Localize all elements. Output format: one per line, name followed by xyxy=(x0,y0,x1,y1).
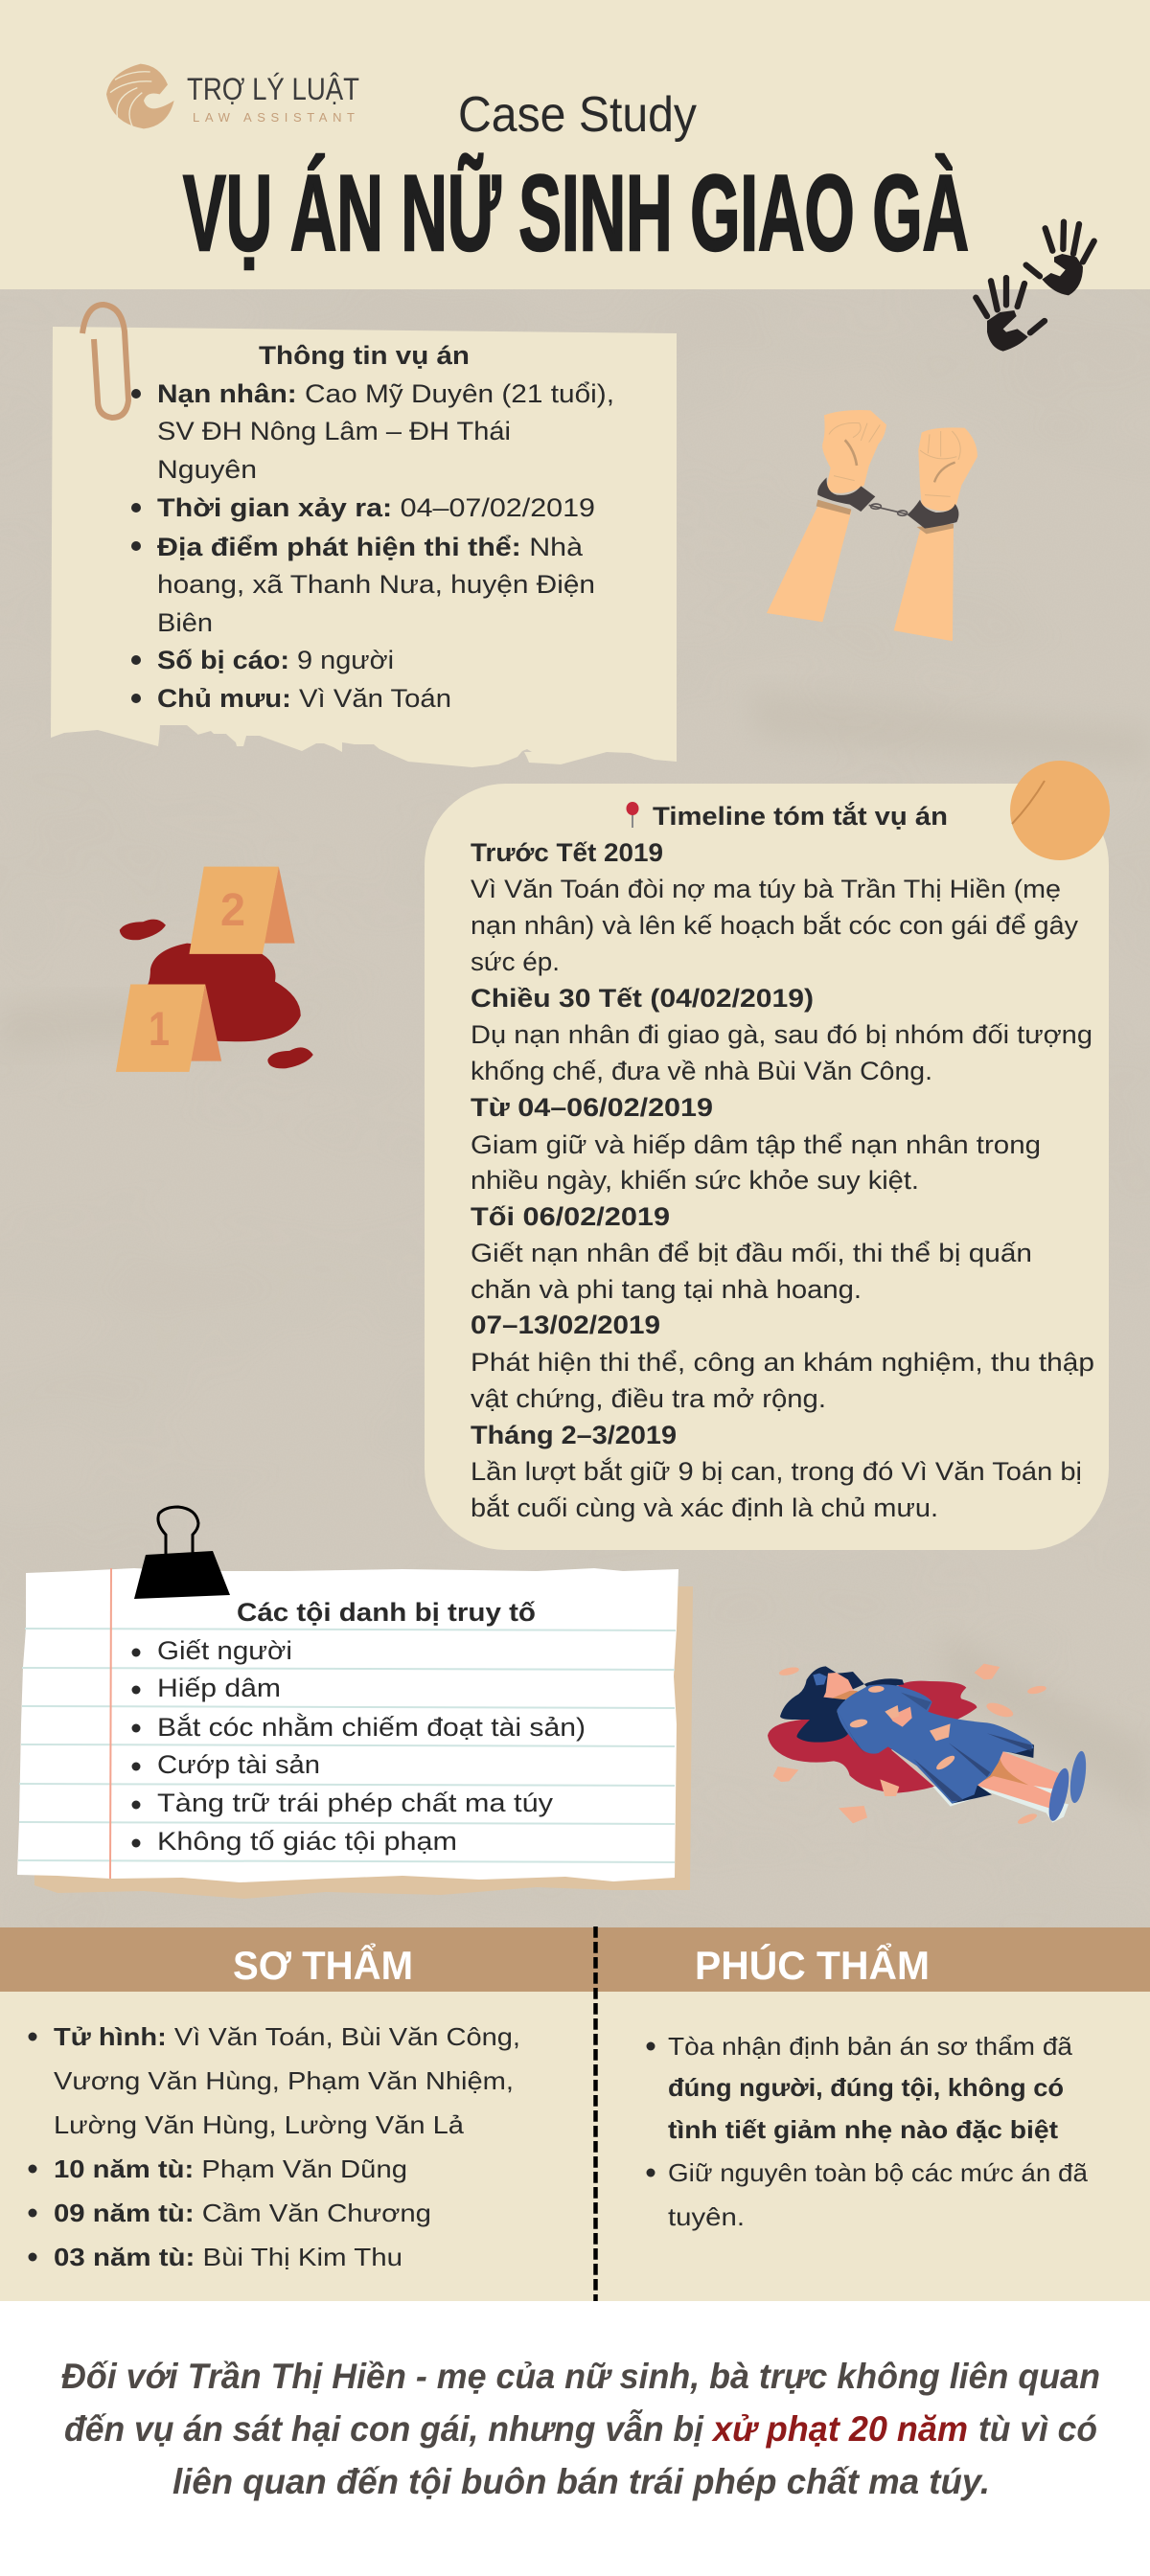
column: first instance sentences: Vương Văn Hùng, Phạm Văn Nhiệm, xyxy=(54,2066,514,2095)
heading: appeal: PHÚC THẨM xyxy=(695,1942,930,1988)
timeline entries: vật chứng, điều tra mở rộng. xyxy=(471,1384,826,1413)
closing statement: liên quan đến tội buôn bán trái phép chất ma túy. xyxy=(172,2462,990,2501)
column: appeal outcome: tình tiết giảm nhẹ nào đặc biệt xyxy=(668,2115,1058,2144)
subtitle: Case Study: Case Study xyxy=(458,87,697,143)
icon: eagle emblem xyxy=(106,64,174,128)
timeline entries: Chiều 30 Tết (04/02/2019) xyxy=(471,984,814,1013)
timeline entries: khống chế, đưa về nhà Bùi Văn Công. xyxy=(471,1057,932,1085)
heading: Thông tin vụ án xyxy=(259,341,470,370)
column: first instance sentences: 09 năm tù: Cầm Văn Chương xyxy=(54,2199,431,2227)
icon: victim lying in blood with leaves xyxy=(768,1664,1089,1826)
closing statement: đến vụ án sát hại con gái, nhưng vẫn bị xyxy=(64,2409,704,2449)
panel: charges notebook page xyxy=(17,1507,693,1899)
textured paper background xyxy=(0,289,1150,1927)
timeline entries: nhiều ngày, khiến sức khỏe suy kiệt. xyxy=(471,1166,919,1195)
heading: Các tội danh bị truy tố xyxy=(237,1598,536,1627)
timeline entries: Vì Văn Toán đòi nợ ma túy bà Trần Thị Hiền (mẹ xyxy=(471,875,1061,903)
bulleted facts: SV ĐH Nông Lâm – ĐH Thái xyxy=(157,417,511,445)
timeline entries: Tối 06/02/2019 xyxy=(471,1202,670,1231)
logo: Trợ Lý Luật: TRỢ LÝ LUẬT xyxy=(187,72,359,106)
icon: handcuffed fists xyxy=(767,410,978,641)
timeline entries: nạn nhân) và lên kế hoạch bắt cóc con gái để gây xyxy=(471,910,1079,940)
bulleted facts: Nạn nhân: Cao Mỹ Duyên (21 tuổi), xyxy=(157,379,614,408)
timeline entries: 07–13/02/2019 xyxy=(471,1311,660,1339)
brown header band xyxy=(0,1927,1150,1992)
marker number 1: 1 xyxy=(149,1002,170,1056)
timeline entries: Giam giữ và hiếp dâm tập thể nạn nhân trong xyxy=(471,1130,1041,1159)
panel: trial verdicts xyxy=(0,1926,1150,2301)
heading: Timeline tóm tắt vụ án xyxy=(653,801,948,831)
icon: red pin xyxy=(627,802,638,828)
bulleted facts xyxy=(131,379,614,713)
closing statement: xử phạt 20 năm xyxy=(711,2409,968,2449)
fallen leaves xyxy=(773,1664,1047,1826)
closing statement xyxy=(0,2301,1150,2576)
ruled lines xyxy=(18,1629,676,1862)
icon: black binder clip xyxy=(134,1507,230,1599)
bulleted facts: Số bị cáo: 9 người xyxy=(157,646,394,674)
closing statement: Đối với Trần Thị Hiền - mẹ của nữ sinh, bà trực không liên quan xyxy=(61,2357,1100,2396)
bulleted facts: Địa điểm phát hiện thi thể: Nhà xyxy=(157,533,584,561)
list of charges: Tàng trữ trái phép chất ma túy xyxy=(157,1789,554,1817)
list of charges xyxy=(132,1636,586,1856)
panel: case information note xyxy=(51,305,677,767)
column: appeal outcome: Tòa nhận định bản án sơ thẩm đã xyxy=(668,2032,1073,2061)
bulleted facts: hoang, xã Thanh Nưa, huyện Điện xyxy=(157,570,595,599)
column: appeal outcome: Giữ nguyên toàn bộ các mức án đã xyxy=(668,2158,1089,2187)
timeline entries: sức ép. xyxy=(471,947,560,976)
column: appeal outcome: tuyên. xyxy=(668,2202,745,2231)
column: first instance sentences: 10 năm tù: Phạm Văn Dũng xyxy=(54,2154,407,2183)
torn paper sheet xyxy=(51,327,677,767)
bulleted facts: Nguyên xyxy=(157,455,257,484)
header band xyxy=(0,0,1150,289)
bulleted facts: Biên xyxy=(157,608,213,637)
column: first instance sentences: Lường Văn Hùng, Lường Văn Lả xyxy=(54,2110,465,2139)
white torn page xyxy=(17,1568,678,1882)
icon: round paper sticker xyxy=(1010,761,1110,860)
column: appeal outcome xyxy=(646,2032,1089,2231)
closing statement: tù vì có xyxy=(978,2409,1097,2449)
column: first instance sentences: 03 năm tù: Bùi Thị Kim Thu xyxy=(54,2243,402,2271)
timeline entries: Giết nạn nhân để bịt đầu mối, thi thể bị quấn xyxy=(471,1239,1032,1267)
timeline entries: Lần lượt bắt giữ 9 bị can, trong đó Vì Văn Toán bị xyxy=(471,1456,1082,1486)
heading: first instance: SƠ THẨM xyxy=(233,1942,413,1988)
tan backing sheet xyxy=(33,1586,693,1899)
timeline entries: Tháng 2–3/2019 xyxy=(471,1421,677,1449)
timeline entries: Dụ nạn nhân đi giao gà, sau đó bị nhóm đối tượng xyxy=(471,1020,1092,1049)
list of charges: Cướp tài sản xyxy=(157,1750,320,1779)
list of charges: Không tố giác tội phạm xyxy=(157,1827,457,1856)
panel: timeline xyxy=(425,761,1110,1550)
marker number 2: 2 xyxy=(220,885,245,936)
column: appeal outcome: đúng người, đúng tội, không có xyxy=(668,2073,1064,2102)
timeline entries: chăn và phi tang tại nhà hoang. xyxy=(471,1275,862,1304)
logo: Trợ Lý Luật: LAW ASSISTANT xyxy=(193,110,355,125)
icon: paperclip xyxy=(82,305,128,418)
timeline entries xyxy=(471,838,1094,1522)
timeline entries: Từ 04–06/02/2019 xyxy=(471,1093,713,1122)
cream body xyxy=(0,1992,1150,2301)
timeline entries: Phát hiện thi thể, công an khám nghiệm, thu thập xyxy=(471,1348,1094,1377)
list of charges: Giết người xyxy=(157,1636,292,1665)
bulleted facts: Thời gian xảy ra: 04–07/02/2019 xyxy=(157,493,595,522)
logo: Trợ Lý Luật xyxy=(106,64,359,128)
column: first instance sentences: Tử hình: Vì Văn Toán, Bùi Văn Công, xyxy=(54,2022,520,2051)
dashed divider xyxy=(593,1926,598,2301)
margin line xyxy=(110,1568,111,1879)
bulleted facts: Chủ mưu: Vì Văn Toán xyxy=(157,684,451,713)
list of charges: Hiếp dâm xyxy=(157,1674,281,1702)
icon: evidence markers and blood pool xyxy=(116,867,313,1072)
list of charges: Bắt cóc nhằm chiếm đoạt tài sản) xyxy=(157,1712,586,1742)
column: first instance sentences xyxy=(29,2022,520,2271)
timeline entries: bắt cuối cùng và xác định là chủ mưu. xyxy=(471,1493,938,1522)
icon: two black handprints xyxy=(976,222,1094,352)
timeline entries: Trước Tết 2019 xyxy=(471,838,663,867)
